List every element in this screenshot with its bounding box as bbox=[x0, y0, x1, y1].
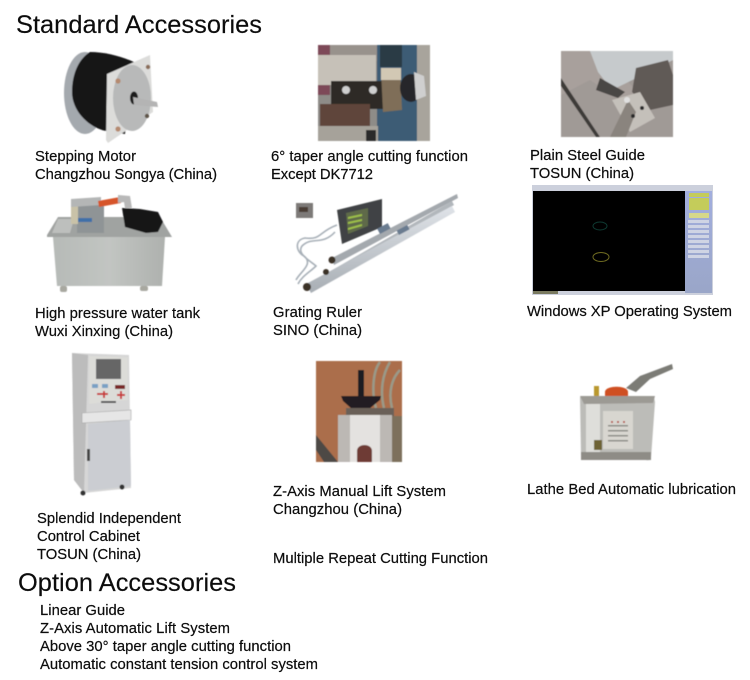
caption: water tank: Wuxi Xinxing (China) bbox=[35, 324, 173, 340]
image: lubrication pump bbox=[580, 364, 673, 460]
image: plain steel guide photo bbox=[561, 51, 673, 137]
image: grating ruler bbox=[296, 194, 458, 293]
image: control cabinet bbox=[72, 353, 131, 496]
caption: control cabinet bbox=[37, 511, 181, 563]
caption: taper angle cutting: Except DK7712 bbox=[271, 167, 373, 183]
caption: water tank: High pressure water tank bbox=[35, 306, 201, 322]
list: option accessories bbox=[40, 603, 318, 673]
caption: grating ruler: SINO (China) bbox=[273, 323, 362, 339]
heading: Option Accessories: Option Accessories bbox=[18, 569, 236, 597]
caption: plain steel guide: Plain Steel Guide bbox=[530, 148, 645, 164]
caption: Windows XP: Windows XP Operating System bbox=[527, 304, 732, 320]
caption: Z-axis lift: Z-Axis Manual Lift System bbox=[273, 484, 446, 500]
caption: control cabinet: Splendid Independent bbox=[37, 511, 181, 527]
image: taper angle cutting photo bbox=[318, 45, 430, 141]
caption: control cabinet: TOSUN (China) bbox=[37, 547, 141, 563]
image: Z-axis manual lift photo bbox=[316, 361, 402, 462]
caption: taper angle cutting: 6° taper angle cutting function bbox=[271, 149, 468, 165]
image: high pressure water tank bbox=[47, 195, 172, 292]
list: option accessories: Linear Guide bbox=[40, 603, 125, 619]
caption: water tank bbox=[35, 306, 201, 340]
image: Windows XP software screenshot bbox=[532, 185, 713, 295]
title: Standard Accessories: Standard Accessories bbox=[16, 11, 262, 39]
list: option accessories: Above 30° taper angle cutting function bbox=[40, 639, 291, 655]
caption: plain steel guide: TOSUN (China) bbox=[530, 166, 634, 182]
caption: stepping motor bbox=[35, 149, 217, 183]
caption: Z-axis lift: Changzhou (China) bbox=[273, 502, 402, 518]
caption: control cabinet: Control Cabinet bbox=[37, 529, 140, 545]
caption: taper angle cutting bbox=[271, 149, 468, 183]
caption: stepping motor: Stepping Motor bbox=[35, 149, 136, 165]
caption: Z-axis lift bbox=[273, 484, 446, 518]
list: option accessories: Z-Axis Automatic Lift System bbox=[40, 621, 230, 637]
caption: stepping motor: Changzhou Songya (China) bbox=[35, 167, 217, 183]
caption: lubrication: Lathe Bed Automatic lubrication bbox=[527, 482, 736, 498]
caption: plain steel guide bbox=[530, 148, 645, 182]
image: stepping motor bbox=[64, 52, 158, 143]
list: option accessories: Automatic constant tension control system bbox=[40, 657, 318, 673]
caption: multiple repeat cutting: Multiple Repeat Cutting Function bbox=[273, 551, 488, 567]
caption: grating ruler: Grating Ruler bbox=[273, 305, 362, 321]
caption: grating ruler bbox=[273, 305, 362, 339]
